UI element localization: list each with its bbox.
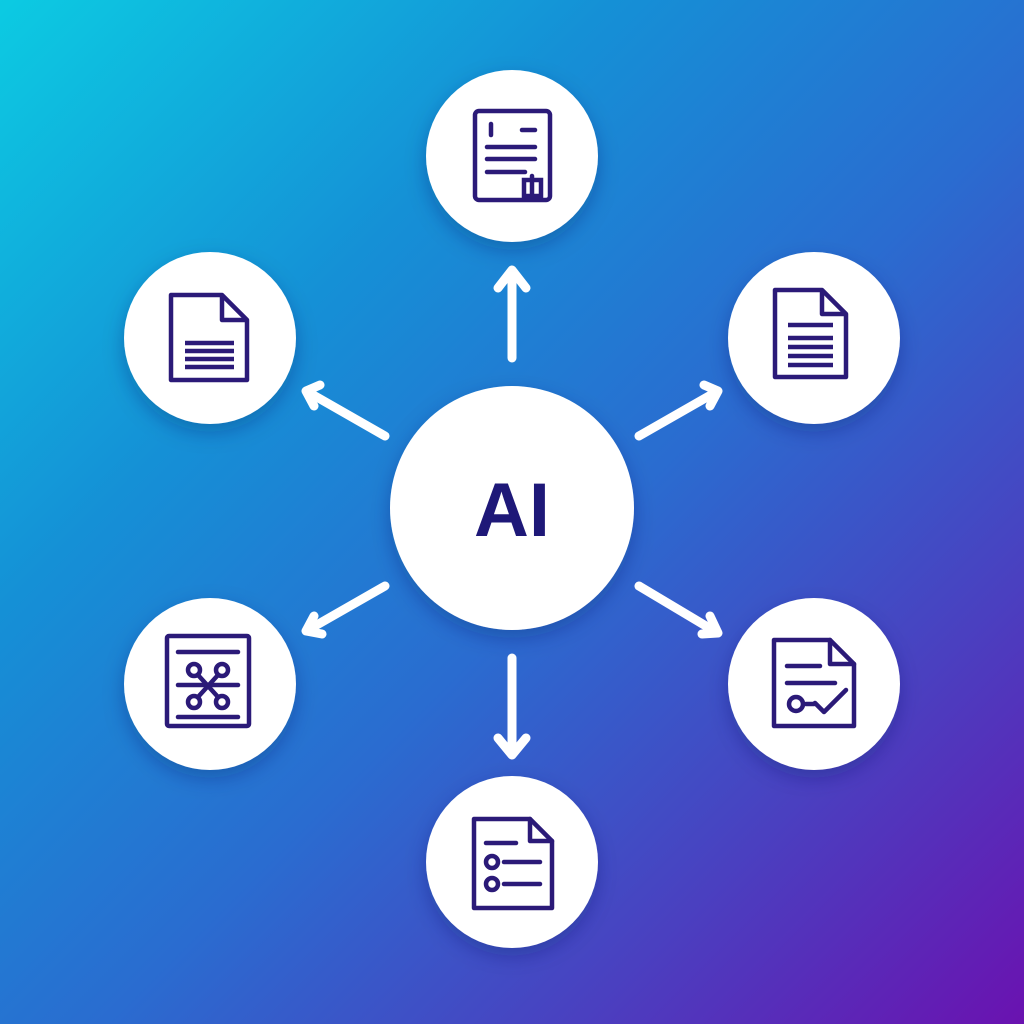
node: lower-right approved document: [728, 598, 900, 770]
arrow: lower-right: [639, 586, 718, 634]
node: top document: [426, 70, 598, 242]
center AI node: AI: [474, 468, 550, 553]
center AI node: [390, 386, 634, 630]
arrow: lower-left: [306, 586, 385, 634]
arrow: down: [498, 658, 526, 755]
node: upper-left document: [124, 252, 296, 424]
node: bottom checklist document: [426, 776, 598, 948]
arrow: upper-right: [639, 385, 718, 436]
arrow: upper-left: [306, 385, 385, 436]
arrow: up: [498, 270, 526, 358]
node: lower-left network document: [124, 598, 296, 770]
node: upper-right document: [728, 252, 900, 424]
